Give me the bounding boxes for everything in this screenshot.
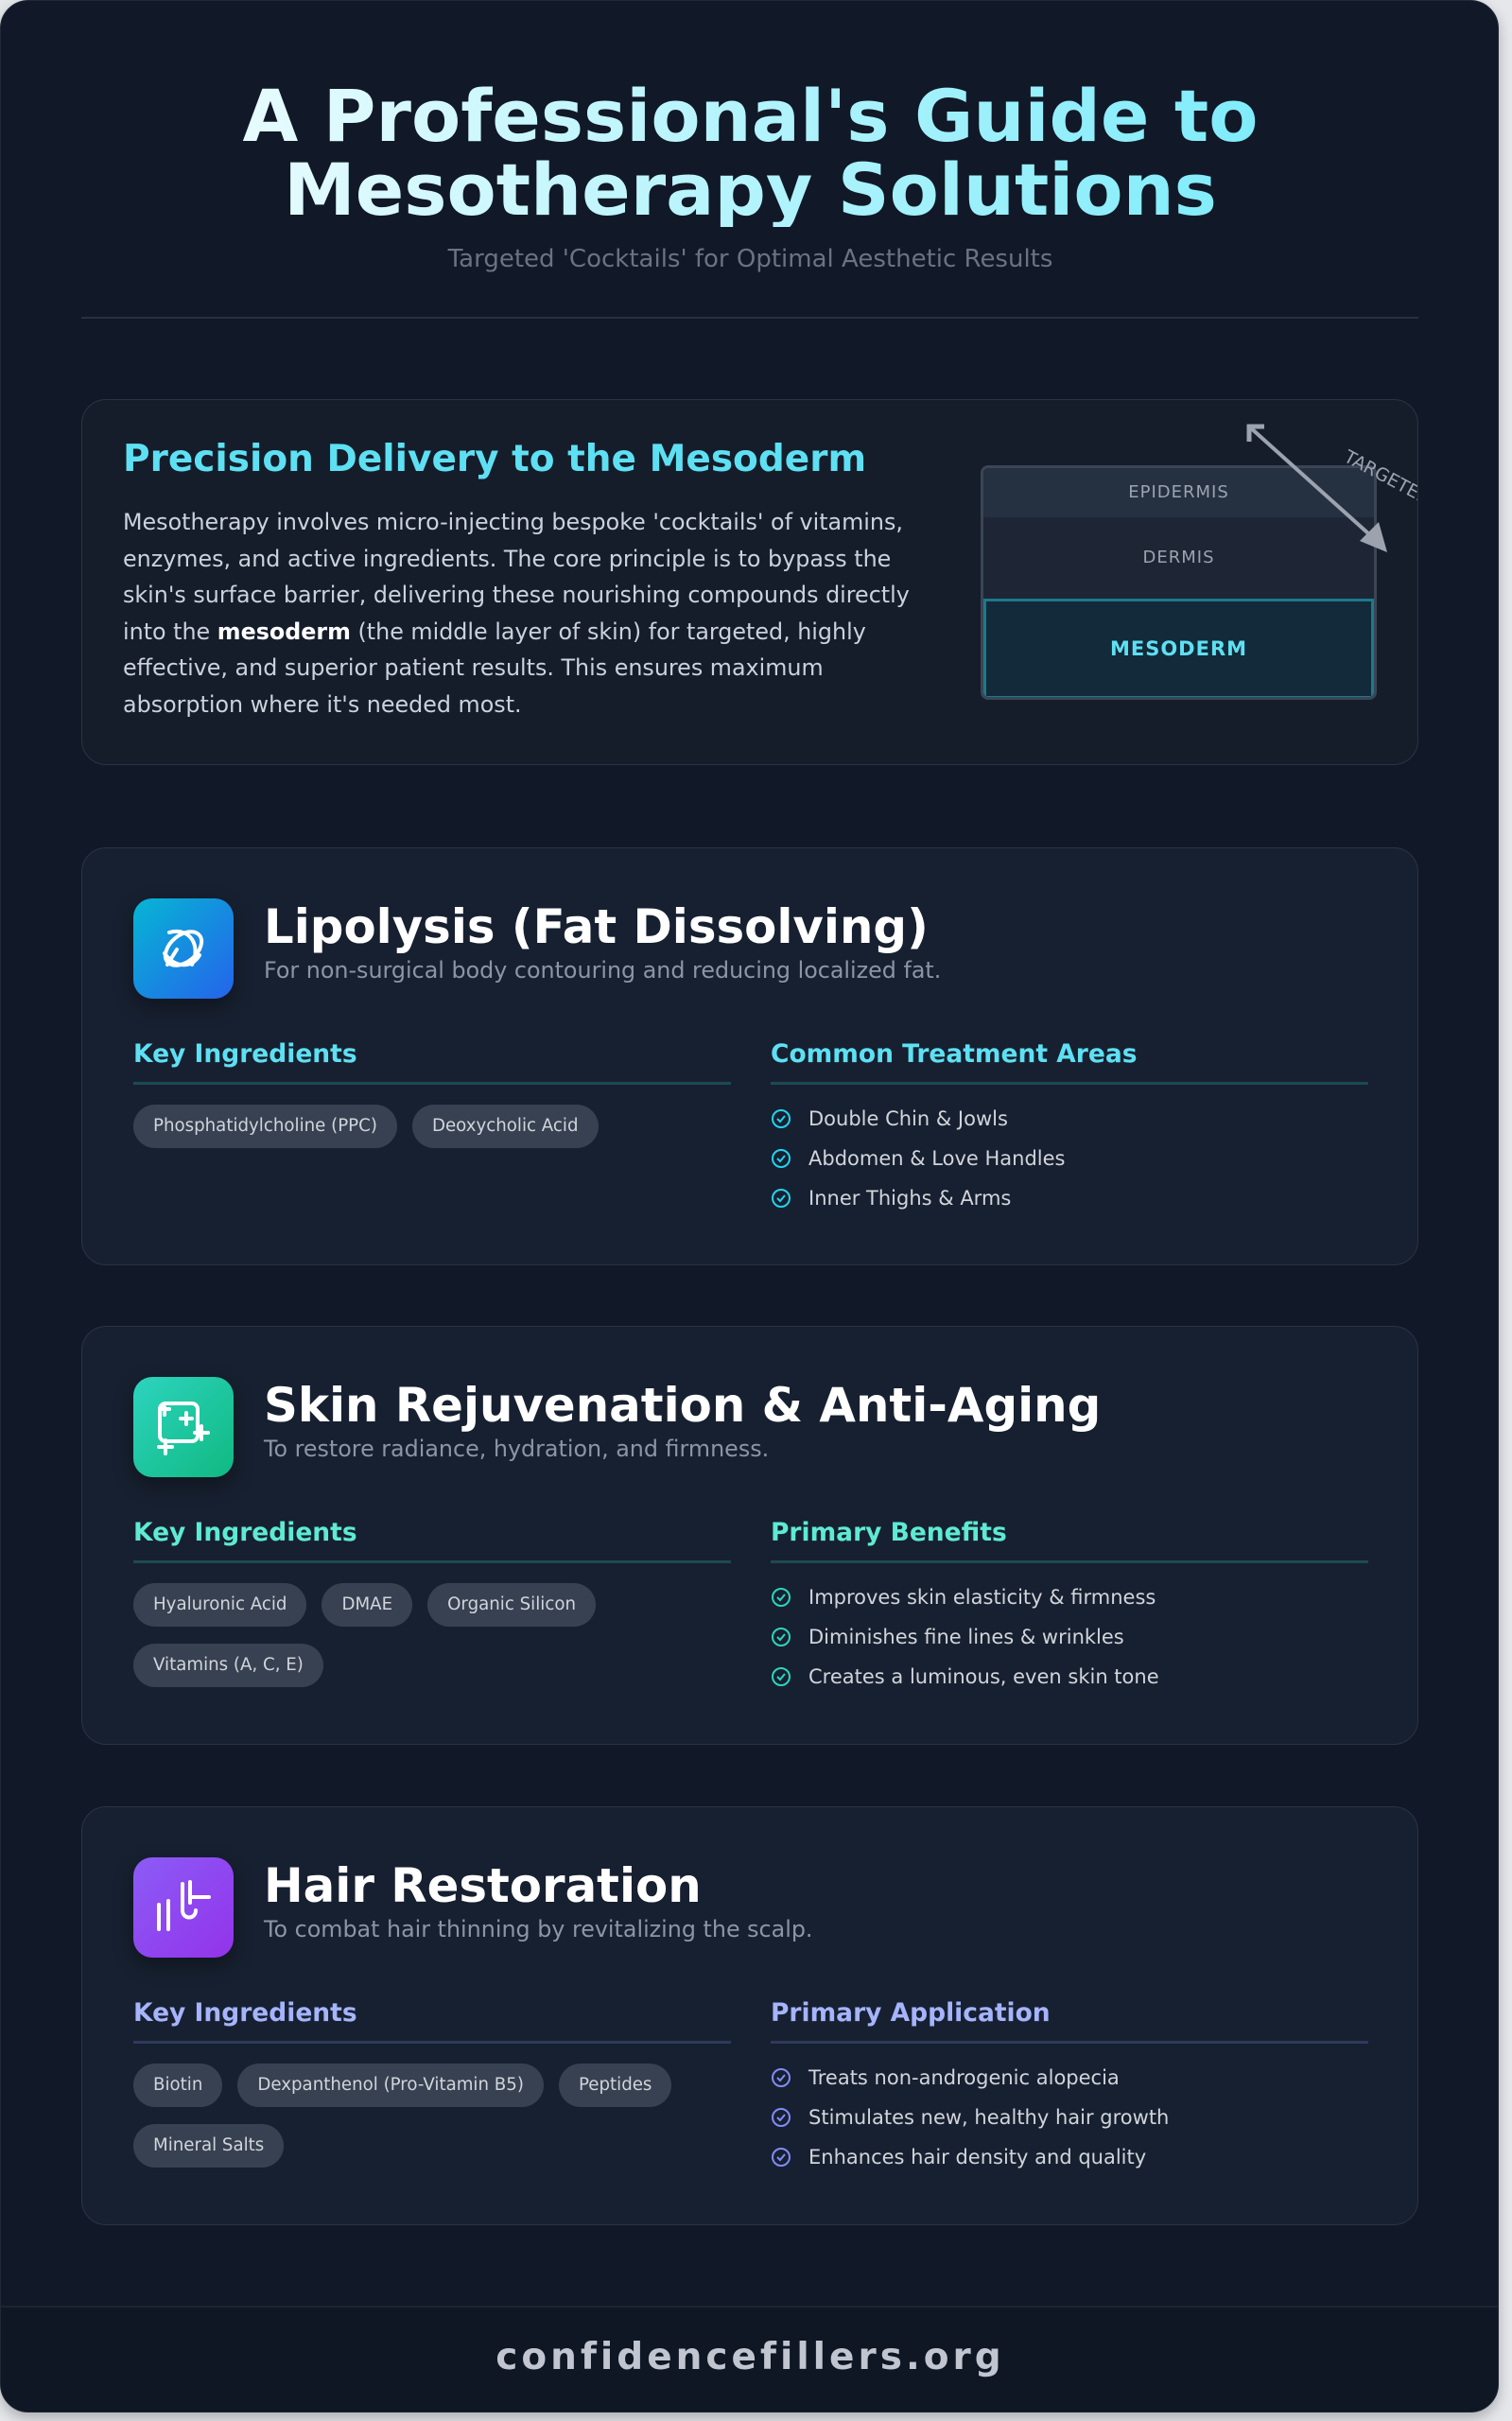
layer: epidermis: EPIDERMIS <box>1128 482 1229 502</box>
benefits list: Improves skin elasticity & firmness <box>808 1586 1156 1609</box>
ingredient pills: Peptides <box>579 2075 652 2095</box>
subheading: To restore radiance, hydration, and firmness. <box>264 1436 769 1462</box>
subtitle: Targeted 'Cocktails' for Optimal Aesthetic Results <box>448 245 1052 273</box>
benefits list: Creates a luminous, even skin tone <box>808 1665 1159 1688</box>
panel: lipolysis <box>81 847 1418 1265</box>
ingredient pills <box>133 1583 596 1687</box>
application list: Enhances hair density and quality <box>808 2146 1146 2168</box>
arrow: needle <box>1246 424 1418 552</box>
treatment list: Double Chin & Jowls <box>808 1107 1008 1130</box>
treatment list: Inner Thighs & Arms <box>808 1187 1011 1210</box>
layer: epidermis <box>983 468 1374 517</box>
ingredient pills: Vitamins (A, C, E) <box>153 1655 304 1675</box>
key ingredients heading: Key Ingredients <box>133 1998 357 2028</box>
layer: mesoderm <box>983 599 1374 699</box>
layer: dermis <box>983 517 1374 599</box>
application list <box>772 2066 1169 2168</box>
diagram: skin layers <box>981 465 1377 700</box>
panel: skin rejuvenation <box>81 1326 1418 1745</box>
heading: Lipolysis (Fat Dissolving) <box>264 899 929 954</box>
layer: dermis: DERMIS <box>1142 548 1214 567</box>
treatment list <box>772 1107 1065 1210</box>
application list: Treats non-androgenic alopecia <box>808 2066 1120 2089</box>
intro heading: Precision Delivery to the Mesoderm <box>123 438 866 480</box>
benefits list: Diminishes fine lines & wrinkles <box>808 1626 1124 1648</box>
footer <box>1 2306 1500 2413</box>
ingredient pills <box>133 2064 671 2168</box>
heading: Hair Restoration <box>264 1858 702 1913</box>
icon: hair <box>133 1857 234 1958</box>
icon: lipolysis <box>133 898 234 999</box>
intro text: Mesotherapy involves micro-injecting bespoke 'cocktails' of vitamins, enzymes, and active ingredients. The core principle is to bypass the skin's surface barrier, delivering these nourishing compounds directly into the mesoderm (the middle layer of skin) for targeted, highly effective, and superior patient results. This ensures maximum absorption where it's needed most. <box>123 509 910 718</box>
application list: Stimulates new, healthy hair growth <box>808 2106 1169 2129</box>
key ingredients heading: Key Ingredients <box>133 1518 357 1547</box>
icon: sparkle frame <box>133 1377 234 1477</box>
panel: hair restoration <box>81 1806 1418 2225</box>
footer text: confidencefillers.org <box>495 2336 1005 2378</box>
ingredient pills: Mineral Salts <box>153 2135 264 2155</box>
treatment areas heading: Common Treatment Areas <box>771 1039 1137 1069</box>
ingredient pills: Biotin <box>153 2075 202 2095</box>
ingredient pills: Phosphatidylcholine (PPC) <box>153 1116 377 1136</box>
heading: Skin Rejuvenation & Anti-Aging <box>264 1378 1101 1433</box>
ingredient pills: Organic Silicon <box>447 1594 576 1614</box>
ingredient pills: DMAE <box>341 1594 392 1614</box>
panel: intro <box>81 399 1418 765</box>
title: Mesotherapy Solutions <box>284 148 1217 232</box>
layer: mesoderm: MESODERM <box>1110 637 1247 660</box>
treatment list: Abdomen & Love Handles <box>808 1147 1065 1170</box>
subheading: For non-surgical body contouring and reducing localized fat. <box>264 957 941 984</box>
benefits list <box>772 1586 1159 1688</box>
subheading: To combat hair thinning by revitalizing the scalp. <box>264 1916 813 1942</box>
ingredient pills: Deoxycholic Acid <box>432 1116 579 1136</box>
benefits heading: Primary Benefits <box>771 1518 1007 1547</box>
ingredient pills: Dexpanthenol (Pro-Vitamin B5) <box>257 2075 524 2095</box>
title <box>1 79 1500 227</box>
application heading: Primary Application <box>771 1998 1051 2028</box>
key ingredients heading: Key Ingredients <box>133 1039 357 1069</box>
ingredient pills: Hyaluronic Acid <box>153 1594 287 1614</box>
title: A Professional's Guide to <box>243 74 1258 158</box>
ingredient pills <box>133 1105 599 1148</box>
